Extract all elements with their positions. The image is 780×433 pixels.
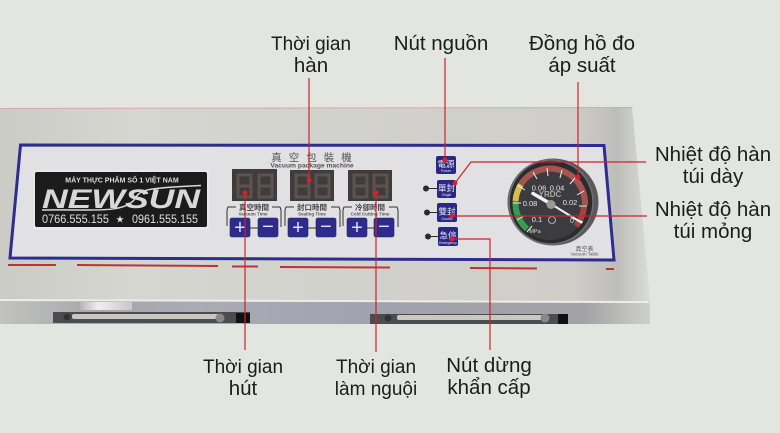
control panel (10, 145, 614, 260)
label: pressure gauge: áp suất (548, 54, 616, 77)
pressure gauge: YRDC (539, 190, 562, 199)
label: thin bag sealing temperature: túi mỏng (674, 220, 752, 243)
sealing time controls: − (320, 216, 332, 238)
label: sealing time: Thời gian (271, 34, 351, 55)
label: thick bag sealing temperature: túi dày (683, 165, 744, 188)
emergency button (425, 227, 458, 246)
emergency button: 急停 (439, 230, 457, 240)
display: cold cutting time (348, 170, 392, 201)
label: thin bag sealing temperature: Nhiệt độ hàn (655, 198, 771, 221)
display: vacuum time (232, 169, 277, 201)
panel title: 真空包裝機 (271, 151, 359, 164)
logo plate: ★ (116, 215, 124, 224)
sealing time controls: 封口時間 (297, 202, 327, 212)
label: vacuum time: Thời gian (203, 357, 283, 378)
bottom metal strip (0, 300, 650, 324)
cold cutting time controls: 冷卻時間 (355, 202, 385, 212)
pressure gauge: 0.06 (532, 184, 546, 192)
left hinge (53, 312, 250, 323)
logo plate (33, 170, 209, 230)
power button: Power (441, 169, 452, 173)
sealing time controls: + (292, 217, 304, 239)
vacuum time controls (227, 202, 281, 239)
cold cutting time controls (343, 202, 398, 239)
pressure gauge: MPa (529, 229, 542, 235)
panel title: Vacuum package machine (270, 162, 354, 170)
cold cutting time controls: + (351, 217, 363, 239)
gauge caption: Vacuum Table (570, 252, 599, 256)
gauge ticks (513, 168, 587, 232)
gauge scale (515, 169, 585, 229)
label: thick bag sealing temperature: Nhiệt độ hàn (655, 143, 771, 166)
single seal button: 單封 (438, 183, 455, 193)
single seal button: Single (442, 193, 451, 197)
pressure gauge: 0.1 (532, 215, 542, 224)
label: pressure gauge: Đồng hồ đo (529, 32, 635, 55)
label: emergency stop: Nút dừng (446, 354, 532, 377)
callout lines (245, 58, 647, 352)
label: power button: Nút nguồn (394, 32, 488, 55)
sealing time controls (285, 202, 340, 239)
pressure gauge: 0 (570, 218, 574, 225)
gauge caption: 真空表 (575, 245, 594, 253)
label: sealing time: hàn (294, 54, 328, 77)
gauge caption (570, 245, 599, 256)
cold cutting time controls: − (378, 216, 390, 238)
emergency button: Emergency (439, 241, 457, 245)
power button: 電源 (437, 159, 455, 169)
label: emergency stop: khẩn cấp (447, 376, 531, 399)
label: vacuum time: hút (229, 377, 258, 400)
logo plate: MÁY THỰC PHẨM SỐ 1 VIỆT NAM (65, 174, 179, 184)
pressure gauge: 0.02 (563, 198, 577, 207)
machine body (0, 107, 650, 324)
pressure gauge (508, 158, 598, 246)
double seal button (424, 203, 457, 222)
red reflection under panel (8, 265, 614, 269)
vacuum time controls: 真空時間 (239, 202, 269, 212)
vacuum time controls: + (234, 217, 246, 239)
logo plate: 0961.555.155 (132, 214, 198, 226)
panel title (270, 151, 359, 170)
callout dots (242, 158, 580, 242)
label: cooling time: Thời gian (336, 357, 416, 378)
vacuum time controls: − (262, 216, 274, 238)
right hinge (370, 314, 568, 324)
power button (436, 156, 456, 174)
double seal button: 雙封 (438, 206, 456, 216)
label: cooling time: làm nguội (335, 379, 417, 400)
pressure gauge: 0.08 (523, 199, 537, 208)
single seal button (423, 180, 456, 198)
logo plate: 0766.555.155 (42, 214, 109, 226)
cold cutting time controls: Cold Cutting Time (351, 212, 390, 216)
logo plate: NEWSUN (42, 184, 201, 214)
sealing time controls: Sealing Time (298, 212, 326, 216)
pressure gauge: 0.04 (550, 184, 564, 192)
double seal button: Double (441, 217, 453, 221)
display: sealing time (290, 170, 334, 201)
vacuum time controls: Vacuum Time (239, 212, 268, 216)
gauge needle (533, 194, 582, 223)
